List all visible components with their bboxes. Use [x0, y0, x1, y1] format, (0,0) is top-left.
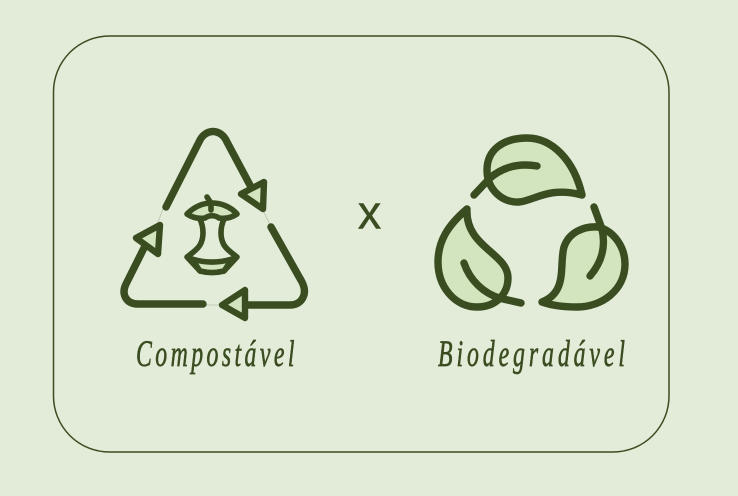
arrow: bottom-left side	[124, 246, 203, 304]
arrow: bottom-right side	[245, 227, 304, 305]
label: multiplication x: x	[358, 186, 381, 238]
apple stem	[207, 197, 211, 210]
icon: apple core	[187, 197, 237, 272]
left leaf	[438, 209, 521, 307]
arrowhead: right	[241, 182, 264, 209]
arrowhead: bottom	[222, 290, 245, 318]
right leaf	[542, 207, 625, 307]
apple body	[187, 203, 237, 218]
label: Biodegradável: Biodegradável	[438, 333, 625, 374]
icon: compostable recycling triangle	[124, 132, 304, 318]
label: Compostável: Compostável	[136, 333, 294, 374]
panel: rounded card	[54, 36, 669, 452]
top leaf	[474, 138, 582, 202]
arrow: top-right side	[166, 132, 251, 207]
icon: three leaves	[438, 138, 625, 307]
arrowhead: left	[136, 225, 160, 254]
